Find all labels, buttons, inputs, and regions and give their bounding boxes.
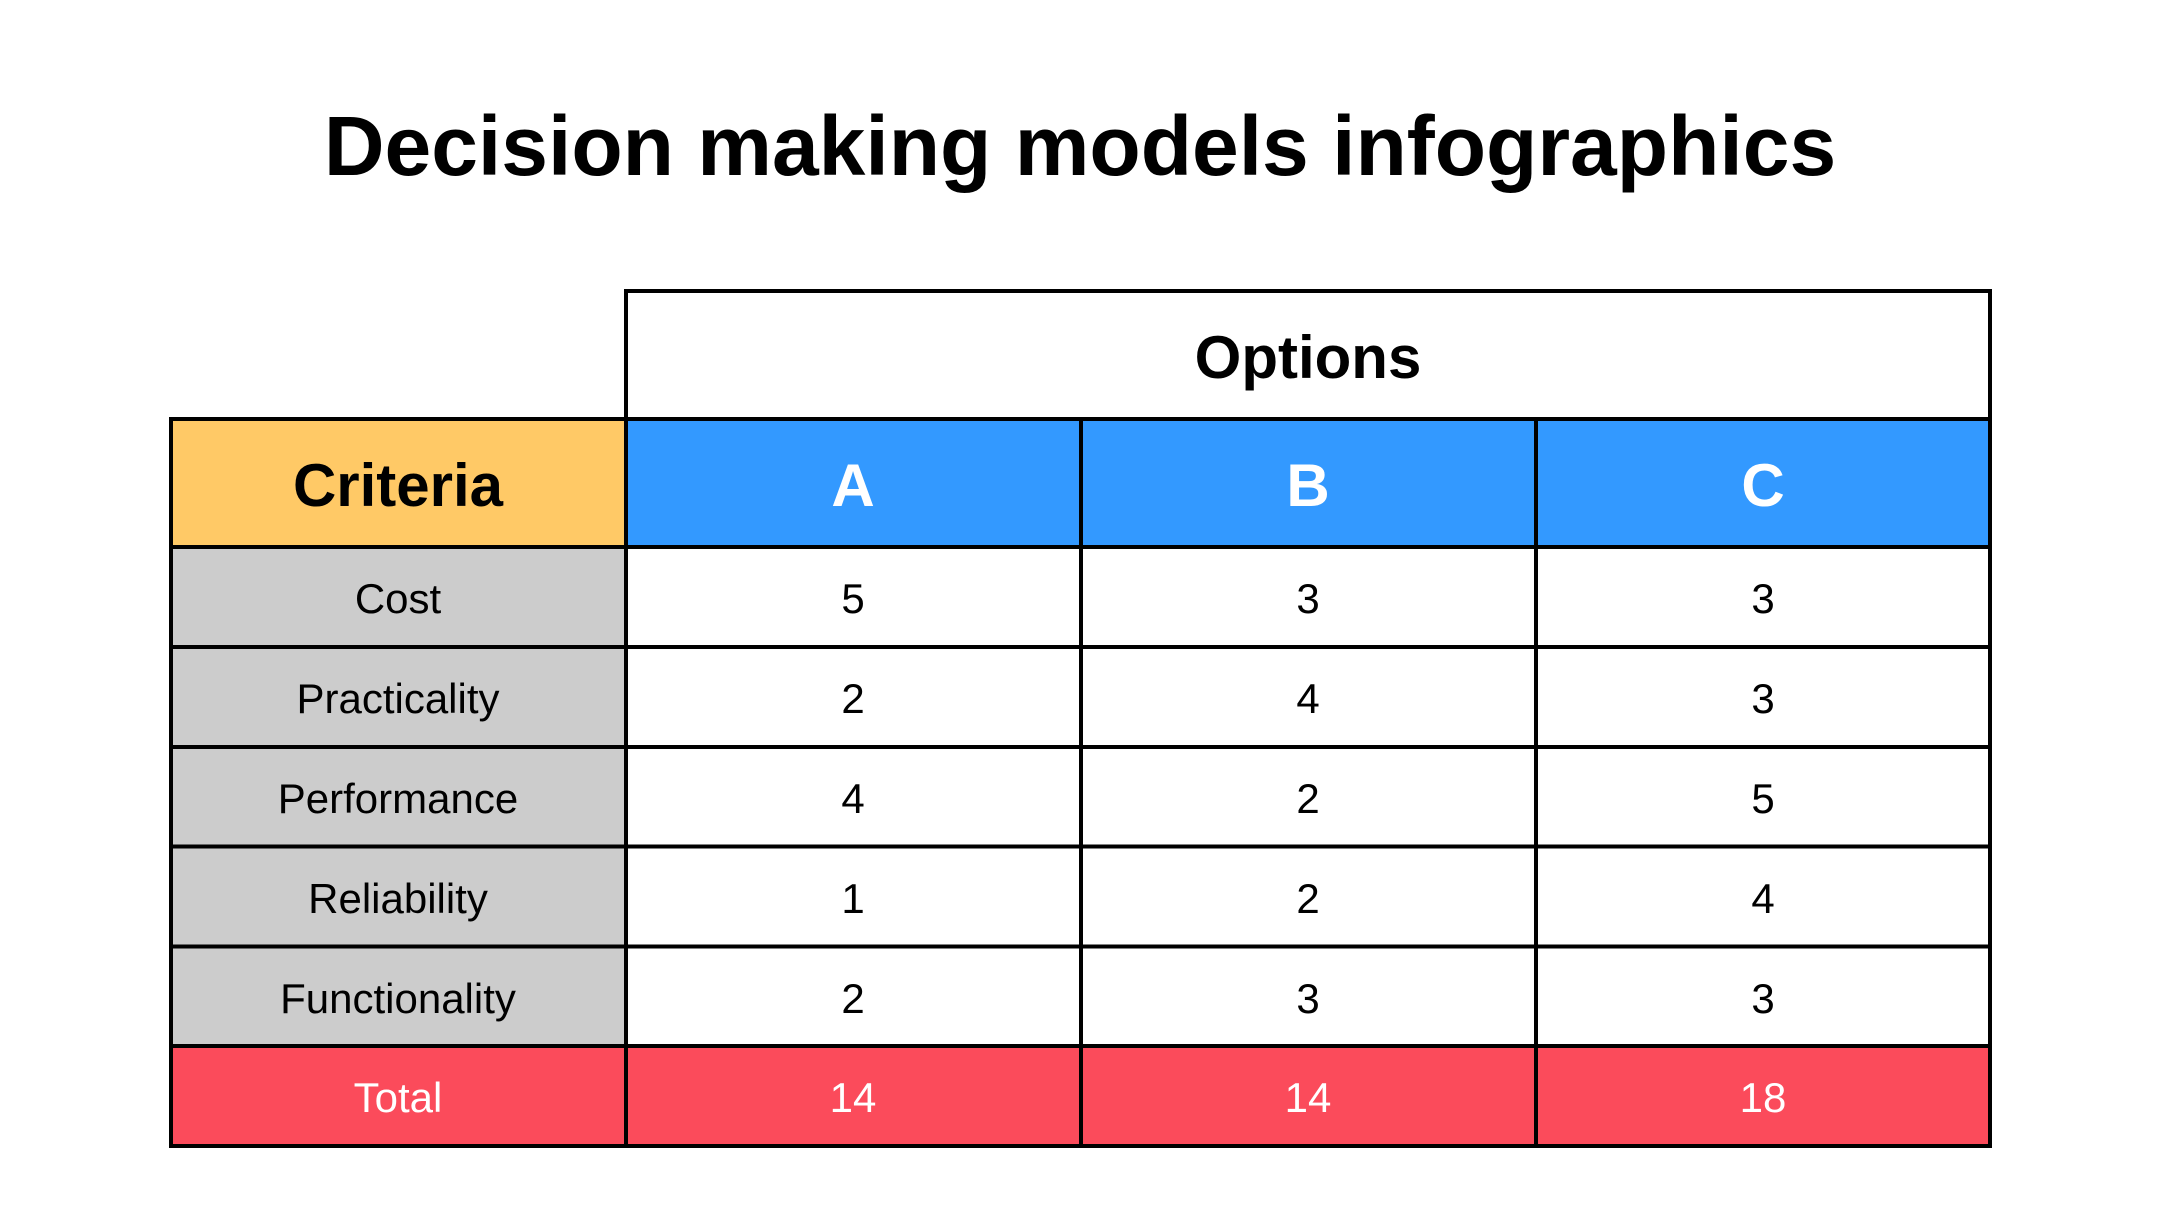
- header: option C: [1536, 419, 1990, 547]
- scores: option A: 2: [841, 675, 865, 722]
- scores: option B: [1296, 575, 1320, 1022]
- criteria label column: [171, 547, 626, 1046]
- scores: option C: 5: [1751, 775, 1775, 822]
- scores: option A: 4: [841, 775, 865, 822]
- header: option A: A: [831, 452, 875, 519]
- header: criteria: Criteria: [293, 452, 504, 519]
- criteria label column: Functionality: [280, 975, 516, 1022]
- header: option B: B: [1286, 452, 1330, 519]
- header: option B: [1081, 419, 1536, 547]
- criteria label column: Practicality: [296, 675, 500, 722]
- scores: option C: [1751, 575, 1775, 1022]
- criteria label column: Performance: [278, 775, 518, 822]
- scores: option B: 3: [1296, 575, 1320, 622]
- scores: option A: 5: [841, 575, 865, 622]
- scores: option B: 4: [1296, 675, 1320, 722]
- scores: option B: 2: [1296, 875, 1320, 922]
- header: options: [626, 291, 1990, 419]
- scores: option A: 1: [841, 875, 865, 922]
- scores: option C: 3: [1751, 675, 1775, 722]
- title: Decision making models infographics: [324, 99, 1836, 193]
- scores: option C: 3: [1751, 975, 1775, 1022]
- scores: option A: [841, 575, 865, 1022]
- scores: option B: 3: [1296, 975, 1320, 1022]
- criteria label column: Cost: [355, 575, 442, 622]
- header: option A: [626, 419, 1081, 547]
- decision matrix table: [171, 291, 1990, 1146]
- total row: 18: [1740, 1074, 1786, 1121]
- scores: option C: 3: [1751, 575, 1775, 622]
- header: option C: C: [1741, 452, 1785, 519]
- scores: option C: 4: [1751, 875, 1775, 922]
- scores: option B: 2: [1296, 775, 1320, 822]
- total row: 14: [1285, 1074, 1331, 1121]
- total row: 14: [830, 1074, 876, 1121]
- header: options: Options: [1195, 324, 1421, 391]
- total row: [171, 1046, 1990, 1146]
- criteria label column: Reliability: [308, 875, 488, 922]
- header: criteria: [171, 419, 626, 547]
- total row: Total: [354, 1074, 442, 1121]
- scores: option A: 2: [841, 975, 865, 1022]
